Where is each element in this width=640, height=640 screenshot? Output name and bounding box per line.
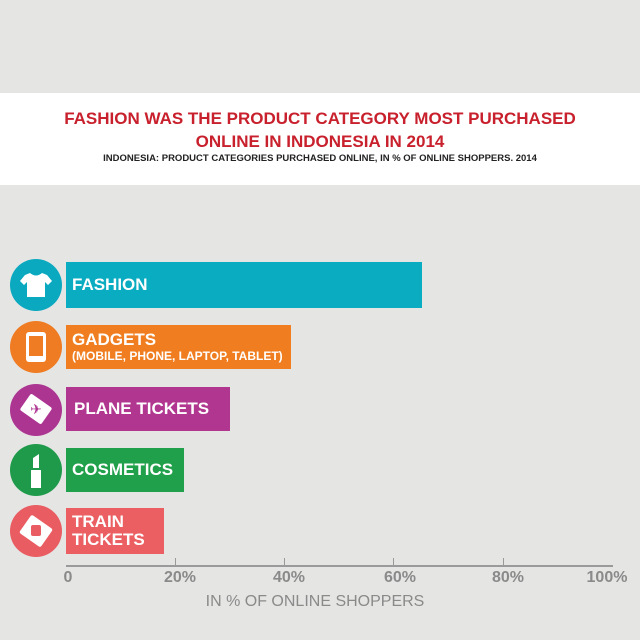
bar: fashion [66, 262, 422, 308]
bar: cosmetics [66, 448, 184, 492]
bar: cosmetics: COSMETICS [72, 460, 173, 479]
bar: train tickets: TICKETS [72, 530, 145, 549]
header band [0, 93, 640, 185]
axis labels [64, 569, 627, 586]
title: FASHION WAS THE PRODUCT CATEGORY MOST PURCHASED [64, 109, 576, 128]
bar: train tickets [66, 508, 164, 554]
axis title: IN % OF ONLINE SHOPPERS [206, 593, 424, 610]
icon: tablet [10, 321, 62, 373]
bar: fashion: FASHION [72, 275, 148, 294]
bar: plane tickets [66, 387, 230, 431]
text: 0 [64, 569, 72, 586]
subtitle: INDONESIA: PRODUCT CATEGORIES PURCHASED ONLINE, IN % OF ONLINE SHOPPERS. 2014 [103, 153, 537, 164]
bar: train tickets: TRAIN [72, 512, 124, 531]
title: ONLINE IN INDONESIA IN 2014 [196, 132, 444, 151]
bar: gadgets: GADGETS [72, 330, 156, 348]
bar: gadgets: (MOBILE, PHONE, LAPTOP, TABLET) [72, 348, 283, 362]
icon: plane ticket [10, 384, 62, 436]
icon: t-shirt [10, 259, 62, 311]
text: 60% [384, 569, 416, 586]
text: 40% [273, 569, 305, 586]
text: 100% [587, 569, 627, 586]
bar: gadgets [66, 325, 291, 369]
icon: plane ticket: ✈ [30, 401, 42, 417]
text: 20% [164, 569, 196, 586]
text: 80% [492, 569, 524, 586]
bar: plane tickets: PLANE TICKETS [74, 399, 209, 418]
icon: train ticket [10, 505, 62, 557]
title [64, 109, 576, 151]
axis [66, 565, 613, 567]
icon: lipstick [10, 444, 62, 496]
